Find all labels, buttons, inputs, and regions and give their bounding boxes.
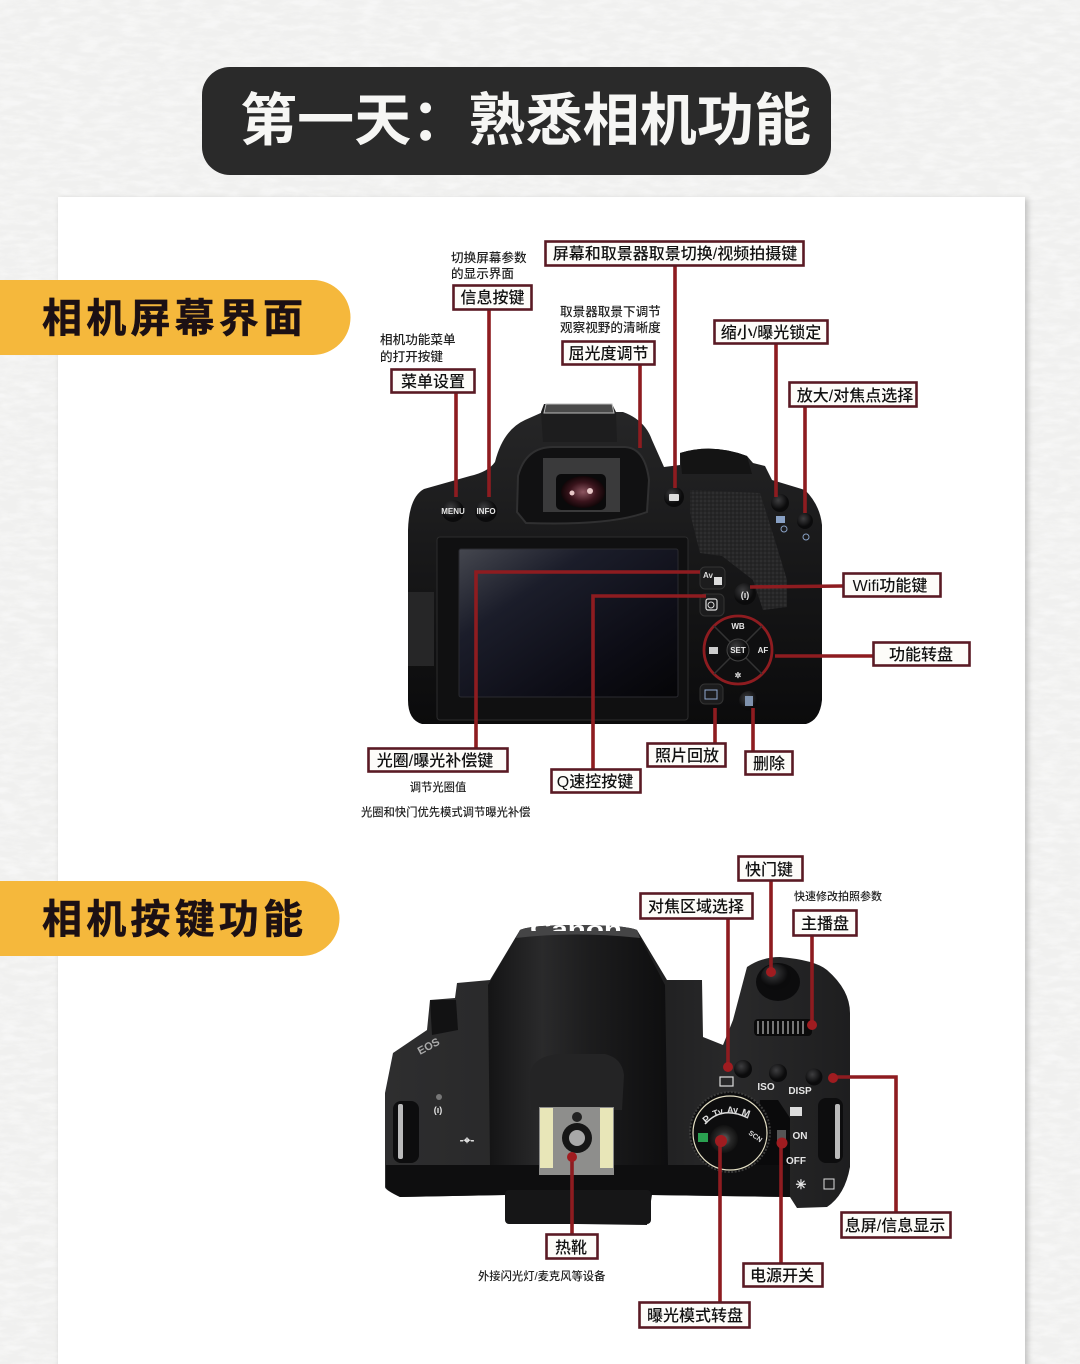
left diopter dial [430,1000,458,1035]
hot shoe on prism [541,404,617,442]
power switch: OFF [786,1156,806,1167]
line: aperture [476,572,700,748]
label: mode dial: 曝光模式转盘 [647,1307,743,1325]
label: magnify [790,382,916,406]
title banner: 第一天：熟悉相机功能 [240,89,811,153]
line: info [487,310,491,497]
label: display off [842,1212,950,1238]
label: AE lock [714,320,828,344]
camera top body [385,925,850,1225]
white content panel [58,197,1028,1364]
camera top view [385,919,850,1225]
line: AE lock [774,344,778,497]
delete button [739,691,759,711]
label: playback [648,744,726,766]
label: shutter: 快门键 [745,860,793,879]
line: power [779,1140,783,1263]
label: function dial: 功能转盘 [889,646,953,664]
line: menu [454,393,458,497]
power switch: ON [792,1131,808,1142]
LCD screen [459,549,678,697]
label: view switch key [546,242,804,266]
Av compensation button: Av [703,571,713,580]
main dial [680,449,752,474]
label: delete: 删除 [753,755,785,773]
note: menu description: 的打开按键 [380,349,443,364]
note: menu description: 相机功能菜单 [380,332,456,347]
line: mode dial [718,1140,722,1302]
note: main dial description: 快速修改拍照参数 [794,889,882,903]
label: diopter [562,342,654,364]
note: diopter description [560,305,661,335]
hot shoe plate [539,1107,614,1175]
function control ring [704,616,772,684]
heading tab: camera screen interface: 相机屏幕界面 [42,297,307,341]
AF area button [720,1060,752,1086]
label: main dial: 主播盘 [801,915,849,933]
function control ring: SET [730,646,746,655]
line: Q [593,596,706,769]
focus plane mark: -⌖- [460,1133,474,1147]
note: info key description: 的显示界面 [451,266,514,281]
line: shutter [769,881,773,972]
pentaprism top [488,934,668,1165]
label: display off: 息屏/信息显示 [845,1216,945,1235]
camera back body [408,412,822,724]
hand grip texture [690,490,787,610]
main control wheel [754,1019,812,1036]
line end dots [567,967,838,1162]
line: AF area [726,919,730,1068]
playback button [700,684,723,704]
label: menu [392,370,474,392]
note: hot shoe description: 外接闪光灯/麦克风等设备 [478,1269,606,1283]
label: Q key: Q速控按键 [557,772,633,791]
ISO button [757,1064,787,1093]
label: playback: 照片回放 [655,747,719,765]
side port cover [408,592,450,666]
Wi-Fi button: (ı) [741,590,749,600]
brand mark: Canon [530,919,622,941]
label: shutter [738,856,802,880]
mode dial: M [740,1107,751,1120]
label: function dial [874,642,970,666]
line: main dial [810,936,814,1027]
line: hot shoe [570,1155,574,1234]
note: info key description: 切换屏幕参数 [451,250,527,265]
shutter button [756,963,800,1001]
line: magnify [803,407,807,513]
label: view switch key: 屏幕和取景器取景切换/视频拍摄键 [553,245,797,263]
label: diopter: 屈光度调节 [568,344,649,363]
label: AF area [640,894,752,918]
heading tab: camera screen interface [0,280,351,355]
label: info key: 信息按键 [460,288,525,307]
Av compensation button [700,567,725,589]
power switch: ✳ [796,1177,807,1192]
mode dial [690,1092,770,1172]
MENU button: MENU [441,507,465,516]
note: diopter description: 取景器取景下调节 [560,305,661,319]
LCD bezel [437,537,688,720]
line: function dial [775,654,873,658]
Wi-Fi button [734,583,756,605]
base plate [505,1190,651,1224]
viewfinder eyecup [517,447,649,524]
function control ring: ✲ [735,671,742,680]
right side strap lug [818,1098,843,1163]
note: info key description [451,250,527,281]
INFO button: INFO [476,507,496,516]
note: aperture description: 光圈和快门优先模式调节曝光补偿 [361,805,530,819]
label: main dial [794,910,856,936]
power switch [777,1107,834,1192]
prism cap band [516,925,640,938]
label: hot shoe [546,1234,598,1258]
note: aperture description: 调节光圈值 [410,780,466,794]
DISP button [788,1068,822,1097]
DISP button: DISP [788,1086,812,1097]
INFO button [475,500,497,522]
note: diopter description: 观察视野的清晰度 [560,320,661,335]
label: Q key [552,770,640,792]
label: hot shoe: 热靴 [555,1239,587,1257]
heading tab: camera button functions: 相机按键功能 [42,898,307,942]
Q button [700,594,724,616]
EOS mark plate: EOS [416,1036,442,1058]
ISO button: ISO [757,1082,775,1093]
label: mode dial [640,1302,750,1328]
label: aperture exposure compensation: 光圈/曝光补偿键 [377,752,493,770]
mode dial: P [701,1113,713,1126]
label: magnify: 放大/对焦点选择 [797,387,913,405]
dark recess behind switch [755,1100,790,1165]
label: AF area: 对焦区域选择 [648,898,744,916]
line: view switch [673,266,677,488]
function control ring: AF [758,646,768,655]
heading tab: camera button functions [0,881,340,956]
mode dial: Tv [711,1106,725,1119]
leader lines [456,266,896,1302]
AE lock button [771,494,789,532]
label: AE lock: 缩小/曝光锁定 [721,323,821,342]
Wi-Fi lamp [434,1094,442,1115]
note: aperture description [361,780,530,819]
line: delete [751,708,755,751]
line: diopter [638,365,642,448]
line: Wi-Fi [750,586,843,587]
line: display off [830,1077,896,1212]
AF point button [797,513,813,540]
camera back view [408,404,822,724]
line: playback [713,708,717,743]
label: delete [746,752,792,774]
note: menu description [380,332,456,364]
left side strap lug [393,1101,419,1163]
flash shoe hump [530,1054,624,1110]
Live view button [664,487,684,507]
label: info key [454,286,532,310]
MENU button [441,500,465,522]
bottom dark band [386,1165,790,1197]
mode dial: SCN [747,1130,763,1144]
mode dial: Av [727,1105,738,1115]
label: Wi-Fi key: Wifi功能键 [853,577,927,595]
Wi-Fi lamp: (ı) [434,1105,442,1115]
label: power [744,1264,822,1286]
label: Wi-Fi key [844,574,940,596]
label: power: 电源开关 [750,1267,814,1285]
label: menu: 菜单设置 [401,373,465,391]
title banner [202,67,831,175]
label: aperture exposure compensation [368,748,508,772]
function control ring: WB [731,622,745,631]
